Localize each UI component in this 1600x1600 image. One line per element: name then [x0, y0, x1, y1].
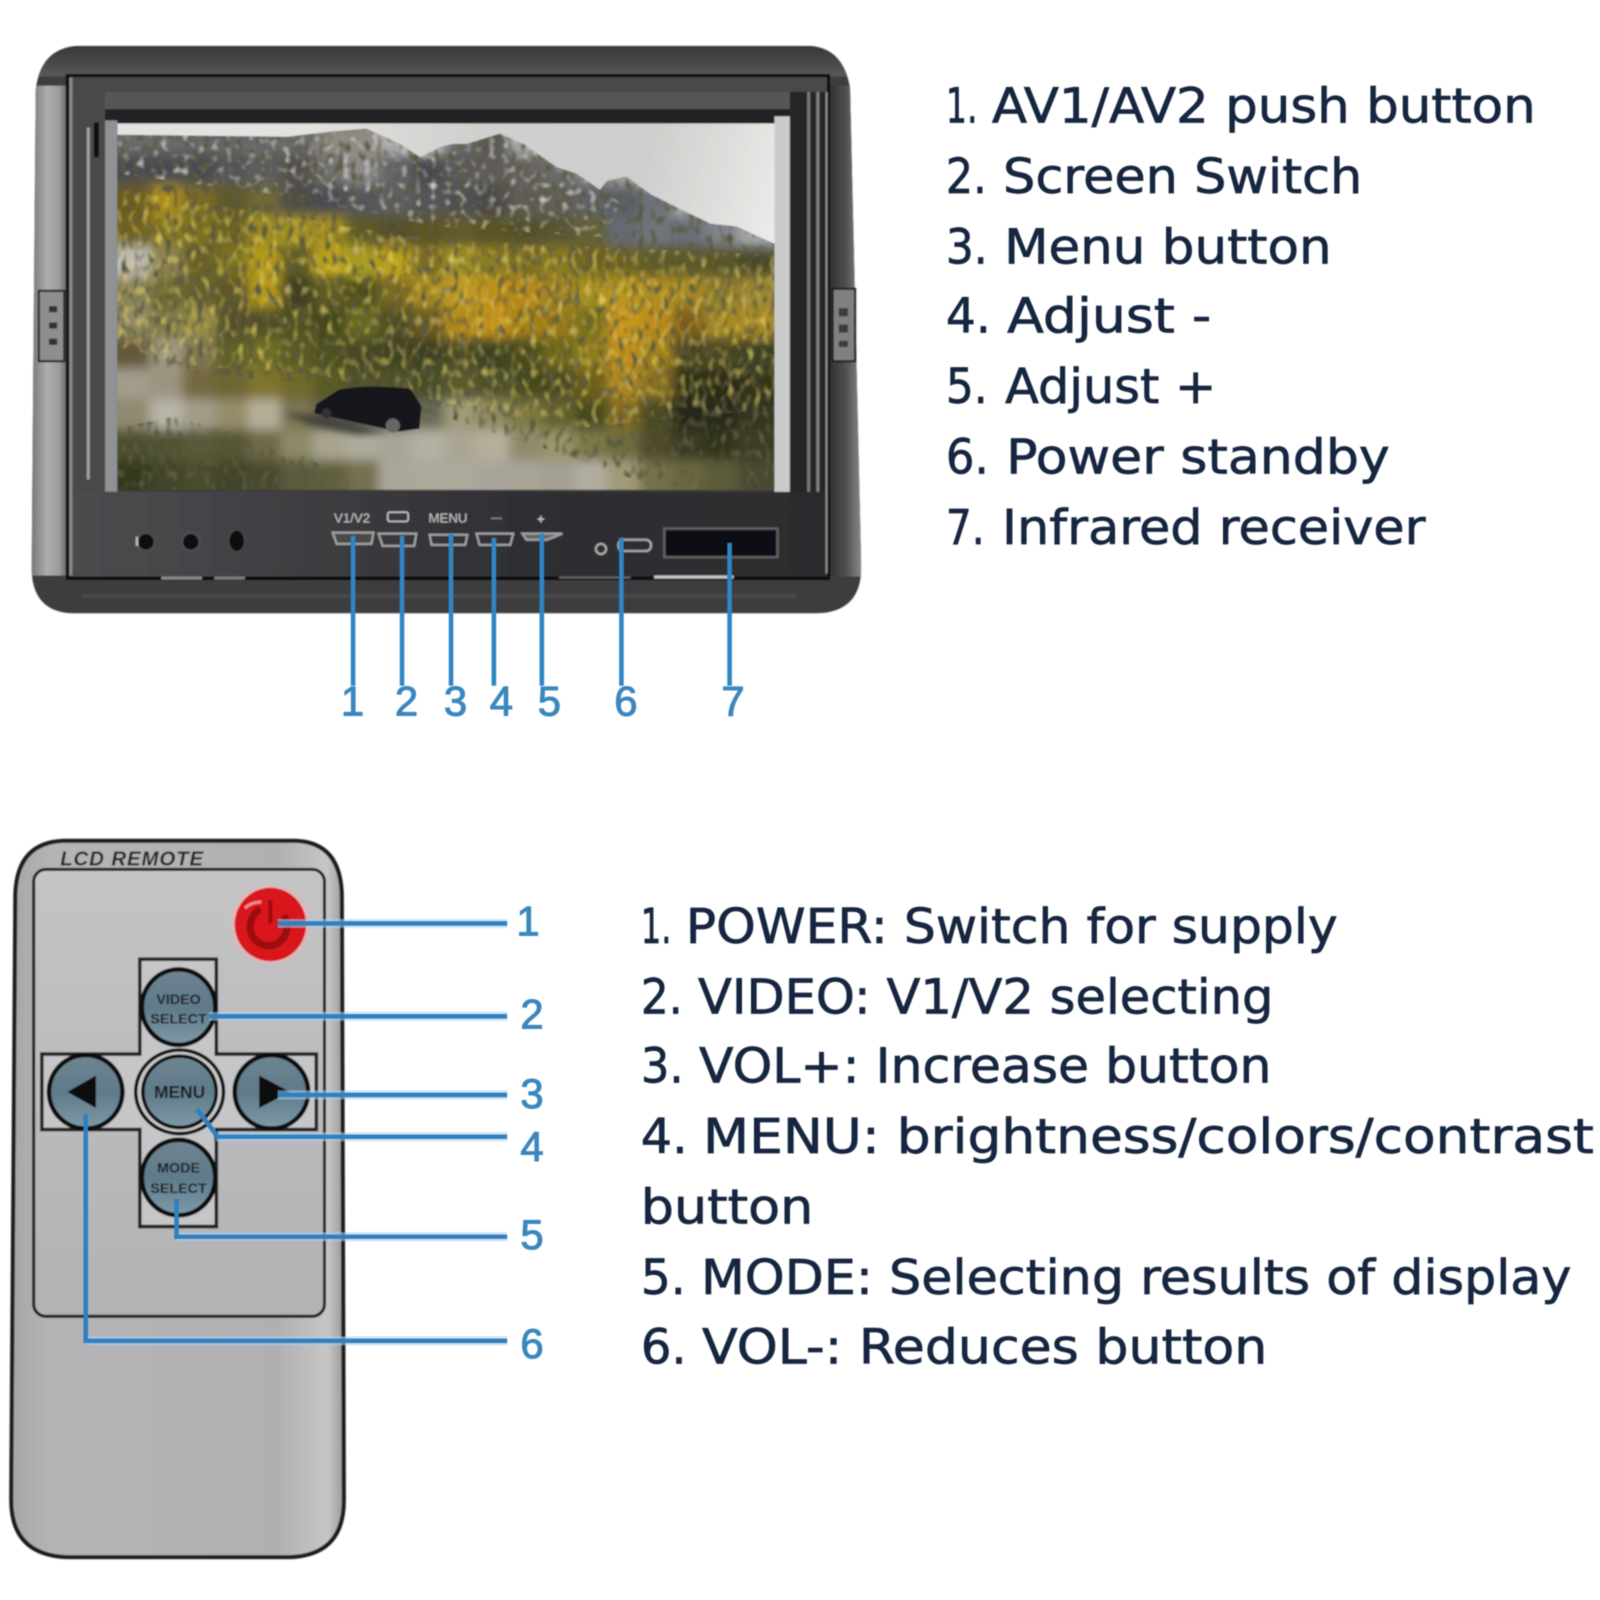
three sensor holes — [135, 529, 247, 553]
remote item 4 — [641, 1109, 1594, 1235]
item 3: Menu button — [1004, 219, 1332, 275]
left bezel rails — [69, 78, 105, 576]
item 4 — [946, 289, 1211, 345]
control labels: V1/V2 — [334, 510, 370, 525]
remote item 3: 3. — [641, 1039, 684, 1095]
item 3: 3. — [946, 219, 988, 275]
monitor callout numbers: 4 — [490, 677, 513, 724]
cross-shaped button plate — [42, 959, 316, 1227]
item 4: 4. — [946, 289, 991, 345]
item 1: 1. — [946, 78, 978, 134]
mode select button: MODE — [157, 1160, 200, 1176]
monitor callout numbers: 1 — [341, 677, 364, 724]
seam along the monitor base — [67, 576, 827, 580]
yellow foliage texture — [117, 189, 774, 429]
item 7: 7. — [946, 500, 985, 556]
remote item 2: 2. — [641, 969, 683, 1025]
remote control — [11, 841, 344, 1557]
remote item 5: MODE: Selecting results of display — [701, 1250, 1571, 1306]
control buttons — [333, 533, 562, 546]
mode select button: SELECT — [150, 1181, 207, 1197]
monitor callout lines — [353, 534, 730, 686]
power button — [231, 885, 310, 964]
right tab — [833, 289, 855, 361]
video select button: VIDEO — [156, 992, 201, 1008]
screen side strips — [105, 116, 790, 496]
monitor callout numbers — [341, 677, 745, 724]
item 2: 2. — [946, 149, 987, 205]
blurred colour mosaic of the scene — [116, 128, 775, 491]
remote callout numbers: 5 — [520, 1211, 544, 1258]
right bezel rails — [790, 92, 828, 573]
remote body — [11, 841, 344, 1557]
monitor feature list — [946, 78, 1536, 556]
remote callout lines — [86, 923, 507, 1341]
monitor — [20, 41, 878, 622]
menu button: MENU — [154, 1082, 205, 1102]
remote item 5: 5. — [641, 1250, 686, 1306]
remote item 4: 4. — [641, 1109, 688, 1165]
monitor inner bezel — [67, 76, 829, 579]
remote item 4: MENU: brightness/colors/contrast — [703, 1109, 1594, 1165]
mode select button — [142, 1140, 215, 1215]
car — [284, 386, 421, 435]
monitor callout numbers: 7 — [721, 677, 745, 724]
remote inner panel — [34, 869, 324, 1316]
volume down button — [49, 1055, 122, 1129]
remote item 1: 1. — [641, 899, 671, 955]
sky — [117, 123, 774, 244]
video select button — [142, 969, 215, 1045]
monitor callout numbers: 3 — [444, 677, 467, 724]
remote item 1: POWER: Switch for supply — [686, 899, 1338, 955]
control labels: MENU — [428, 510, 467, 525]
item 5: 5. — [946, 359, 988, 415]
monitor callout numbers: 5 — [538, 677, 561, 724]
remote item 6: 6. — [641, 1319, 687, 1375]
remote feature list — [641, 899, 1594, 1375]
remote brand label: LCD REMOTE — [60, 848, 204, 870]
remote callout numbers: 6 — [520, 1320, 544, 1367]
monitor chin panel — [72, 492, 826, 577]
remote callout numbers: 4 — [520, 1123, 544, 1170]
remote item 4: button — [641, 1179, 813, 1235]
infrared receiver window — [664, 529, 778, 557]
remote callout numbers: 3 — [520, 1070, 544, 1117]
item 4: Adjust - — [1007, 289, 1211, 345]
volume up button — [235, 1055, 308, 1129]
remote item 6: VOL-: Reduces button — [702, 1319, 1267, 1375]
item 7: Infrared receiver — [1002, 500, 1426, 556]
item 6: 6. — [946, 429, 989, 485]
remote item 2: VIDEO: V1/V2 selecting — [698, 969, 1273, 1025]
item 6: Power standby — [1006, 429, 1390, 485]
dark tree texture — [117, 135, 774, 490]
monitor outer frame — [20, 41, 878, 622]
monitor callout numbers: 2 — [395, 677, 418, 724]
left tab — [39, 291, 64, 361]
control labels: + — [537, 511, 545, 526]
control labels — [334, 510, 545, 526]
rock texture on mountains — [117, 129, 622, 237]
remote callout numbers: 2 — [520, 991, 544, 1038]
remote callout numbers: 1 — [516, 898, 540, 945]
bezel top bands — [69, 78, 827, 123]
screen photo: mountain landscape — [116, 122, 776, 491]
monitor callout numbers: 6 — [614, 677, 638, 724]
video select button: SELECT — [150, 1011, 207, 1027]
item 1: AV1/AV2 push button — [992, 78, 1536, 134]
remote item 3: VOL+: Increase button — [699, 1039, 1271, 1095]
item 2: Screen Switch — [1003, 149, 1362, 205]
menu button — [136, 1050, 223, 1134]
power standby button — [596, 540, 651, 554]
item 5: Adjust + — [1005, 359, 1216, 415]
remote callout numbers — [516, 898, 544, 1367]
